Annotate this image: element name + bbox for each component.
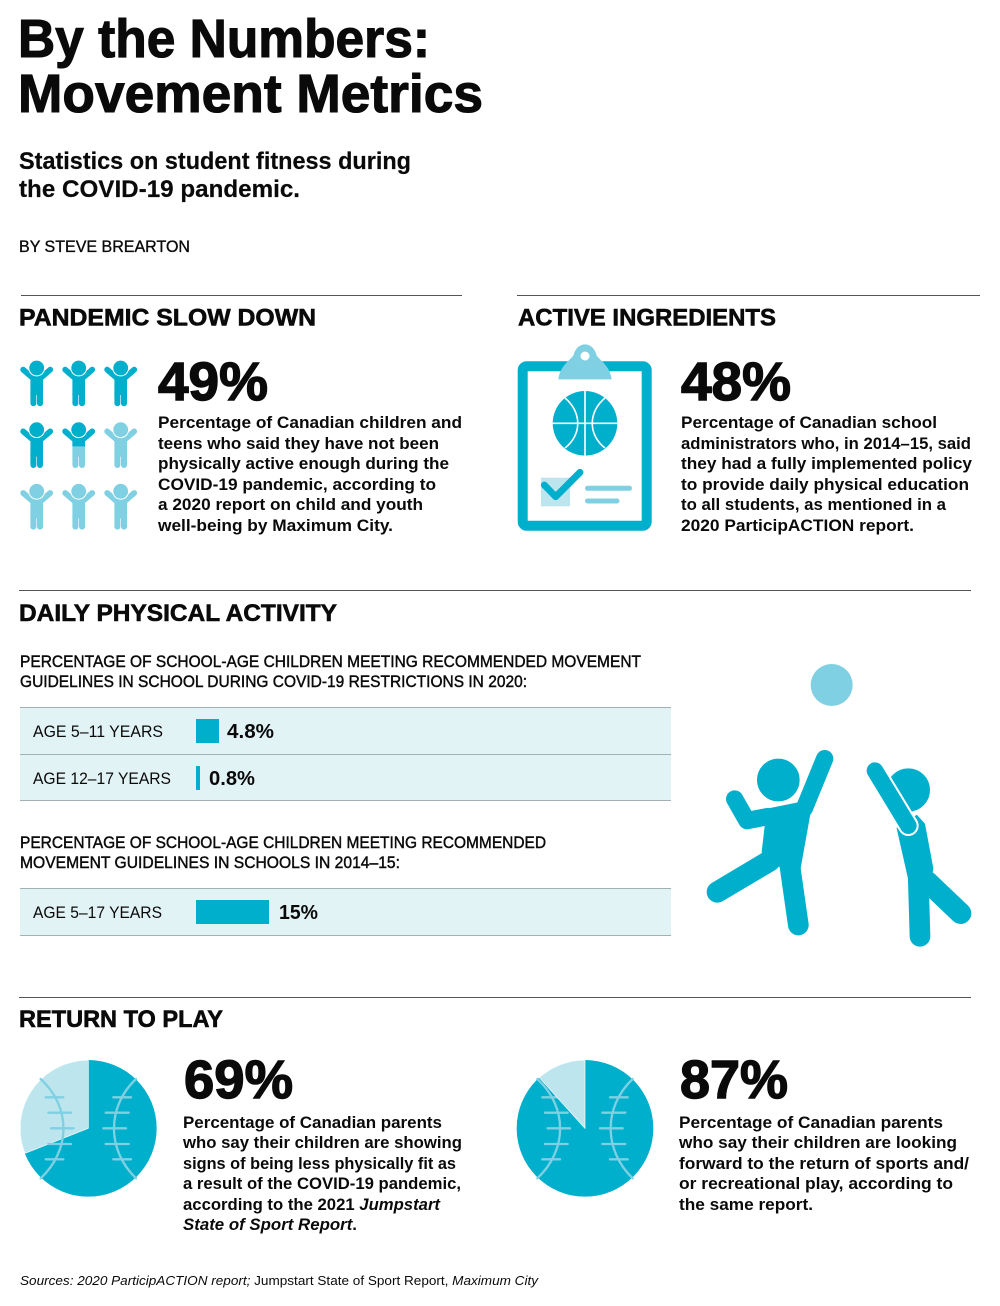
row: age 5-11 [33, 719, 274, 743]
panel: pandemic slow down [19, 296, 462, 535]
heading: active ingredients: ACTIVE INGREDIENTS [518, 305, 776, 332]
title: By the Numbers: [18, 9, 430, 69]
pie chart: 69% baseball [20, 1060, 157, 1197]
subtitle: the COVID-19 pandemic. [19, 176, 300, 203]
bar chart: 2014-15 [20, 888, 671, 936]
byline: BY STEVE BREARTON [19, 237, 190, 256]
pie chart: 87% baseball [517, 1060, 653, 1197]
text block: 48% description: to all students, as mentioned in a [681, 495, 947, 514]
text block: 49% description: COVID-19 pandemic, according to [158, 475, 436, 494]
text block: 48% description [681, 413, 973, 535]
subtitle: Statistics on student fitness during [19, 148, 411, 175]
heading: pandemic slow down: PANDEMIC SLOW DOWN [19, 305, 316, 332]
text block: 48% description: Percentage of Canadian school [681, 413, 937, 432]
text block: 49% description: Percentage of Canadian children and [158, 413, 462, 432]
text block: 87% description: forward to the return of sports and/ [679, 1154, 969, 1173]
chart heading: 2020 guidelines [20, 652, 641, 691]
text block: 69% description: who say their children are showing [182, 1133, 462, 1152]
panel: daily physical activity [19, 590, 971, 936]
icon: grid of nine children [23, 360, 134, 530]
bar chart: 2020 by age [20, 708, 671, 801]
row: age 12-17: AGE 12–17 YEARS [33, 769, 171, 788]
stat: 48%: 48% [681, 352, 791, 412]
text block: 87% description: who say their children are looking [678, 1133, 957, 1152]
panel: return to play [19, 998, 971, 1234]
subtitle [19, 148, 411, 203]
chart heading: 2014-15 guidelines: PERCENTAGE OF SCHOOL-AGE CHILDREN MEETING RECOMMENDED [20, 833, 546, 852]
panel: active ingredients [517, 296, 980, 535]
title [18, 9, 483, 124]
row: age 12-17 [33, 766, 255, 790]
icon: clipboard with basketball [523, 344, 647, 526]
row: age 5-11: AGE 5–11 YEARS [33, 722, 163, 741]
text block: 49% description: a 2020 report on child and youth [158, 495, 423, 514]
bar chart: 2014-15: 15% [279, 902, 318, 924]
text block: 87% description: Percentage of Canadian parents [679, 1113, 943, 1132]
text block: 49% description: physically active enough during the [158, 454, 449, 473]
title: Movement Metrics [18, 64, 483, 124]
bar chart: 2014-15: AGE 5–17 YEARS [33, 903, 162, 922]
heading: daily physical activity: DAILY PHYSICAL ACTIVITY [19, 600, 337, 627]
chart heading: 2014-15 guidelines: MOVEMENT GUIDELINES IN SCHOOLS IN 2014–15: [20, 853, 400, 872]
chart heading: 2014-15 guidelines [20, 833, 546, 872]
heading: return to play: RETURN TO PLAY [19, 1006, 223, 1033]
row: age 12-17: 0.8% [209, 768, 255, 790]
chart heading: 2020 guidelines: PERCENTAGE OF SCHOOL-AGE CHILDREN MEETING RECOMMENDED MOVEMENT [20, 652, 641, 671]
stat: 87%: 87% [680, 1050, 788, 1110]
text block: 48% description: administrators who, in 2014–15, said [681, 434, 971, 453]
text block: 69% description [182, 1113, 462, 1234]
text block: 48% description: 2020 ParticipACTION report. [681, 516, 914, 535]
text block: 48% description: they had a fully implemented policy [681, 454, 973, 473]
text block: 87% description: or recreational play, according to [679, 1174, 953, 1193]
text block: 69% description: according to the 2021 Jumpstart [183, 1195, 441, 1214]
stat: 69%: 69% [184, 1050, 293, 1110]
text block: 69% description: State of Sport Report. [183, 1215, 357, 1234]
text block: 87% description [678, 1113, 969, 1214]
text block: 69% description: signs of being less physically fit as [183, 1154, 456, 1173]
text block: 49% description: well-being by Maximum City. [157, 516, 393, 535]
text block: 48% description: to provide daily physical education [681, 475, 969, 494]
icon: two children playing with a ball [717, 664, 961, 936]
text block: 69% description: Percentage of Canadian parents [183, 1113, 442, 1132]
chart heading: 2020 guidelines: GUIDELINES IN SCHOOL DURING COVID-19 RESTRICTIONS IN 2020: [20, 672, 527, 691]
sources: Sources: 2020 ParticipACTION report; Jumpstart State of Sport Report, Maximum City [20, 1273, 540, 1288]
text block: 69% description: a result of the COVID-19 pandemic, [183, 1174, 461, 1193]
text block: 87% description: the same report. [679, 1195, 813, 1214]
text block: 49% description [157, 413, 462, 535]
text block: 49% description: teens who said they have not been [158, 434, 439, 453]
stat: 49%: 49% [158, 352, 268, 412]
row: age 5-11: 4.8% [227, 721, 274, 743]
